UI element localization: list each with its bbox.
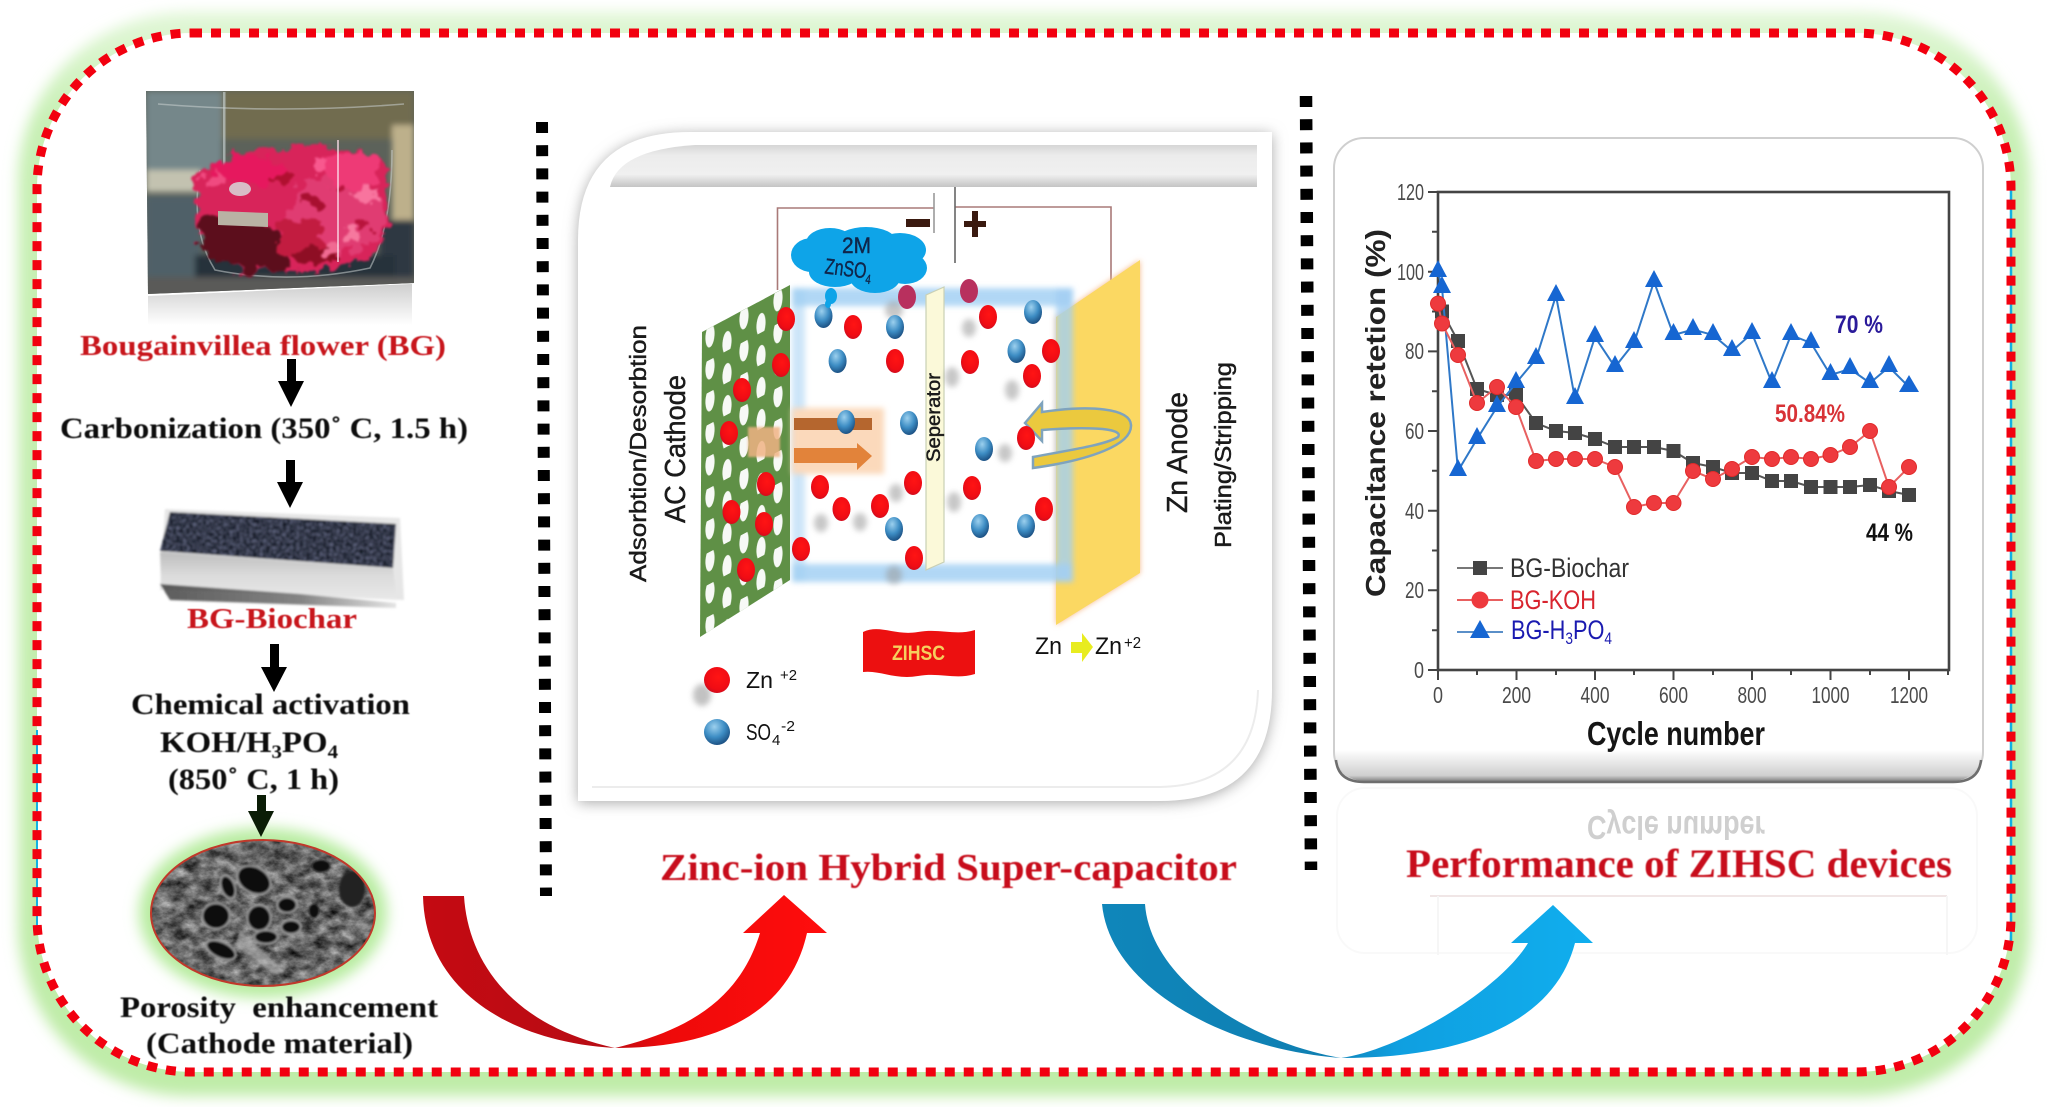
x-axis tick labels: [1433, 682, 1928, 708]
caption: porosity enhancement: Porosity enhancement: [120, 991, 438, 1024]
electrolyte cloud: 2M ZnSO4: 2M: [842, 233, 871, 258]
x-axis tick labels: 1200: [1890, 682, 1928, 708]
plus sign: [964, 211, 986, 237]
panel: capacitance retention chart: [1334, 138, 1983, 782]
ion legend: +2: [780, 667, 797, 684]
x-axis tick labels: 0: [1433, 682, 1443, 708]
y-axis tick labels: 80: [1405, 338, 1424, 364]
ion transport arrows: [748, 408, 884, 474]
y-axis tick labels: 120: [1397, 179, 1424, 205]
arrow: activation to porous carbon: [248, 795, 274, 837]
arrow: carbonization to biochar: [277, 460, 303, 508]
caption: porosity enhancement: [120, 991, 438, 1060]
x-axis tick labels: 800: [1738, 682, 1766, 708]
reaction: Zn to Zn2+: [1035, 633, 1141, 662]
ion legend: Zn: [746, 667, 773, 693]
electrolyte frame: [792, 288, 1073, 582]
reflection of chart panel: Cycle number: [1587, 809, 1765, 846]
ion shadows: [814, 301, 1019, 584]
label: Bougainvillea flower (BG): Bougainvillea flower (BG): [80, 330, 446, 362]
step: chemical activation: Chemical activation: [131, 688, 410, 721]
plot frame and ticks: [1428, 192, 1949, 680]
cathode plate with pores: [700, 285, 790, 637]
step: chemical activation: PO: [282, 726, 328, 759]
sulfate ions: [814, 300, 1042, 541]
rotated electrode labels: Seperator: [924, 372, 945, 462]
left column: bougainvillea to cathode process: [60, 91, 468, 1060]
y-axis tick labels: 60: [1405, 418, 1424, 444]
y-axis tick labels: 20: [1405, 577, 1424, 603]
minus sign: [906, 219, 930, 227]
divider: left dotted line: [542, 122, 546, 896]
anode plate: [1056, 260, 1140, 625]
separator membrane: [926, 287, 944, 570]
x-axis tick labels: 1000: [1812, 682, 1850, 708]
x-axis tick labels: 400: [1580, 682, 1610, 708]
chart legend: BG-KOH: [1510, 585, 1596, 615]
annotation: 44 %: 44 %: [1866, 519, 1913, 547]
anode return arrow: [1025, 403, 1131, 468]
y-axis tick labels: [1397, 179, 1424, 683]
ion legend: SO: [746, 719, 771, 745]
series: BG-KOH: [1430, 296, 1916, 514]
series: BG-H3PO4: [1429, 260, 1919, 476]
rotated electrode labels: Plating/Stripping: [1210, 362, 1236, 548]
rotated electrode labels: Zn Anode: [1162, 392, 1194, 513]
chart legend: PO: [1573, 615, 1604, 645]
panel: zinc-ion hybrid supercapacitor schematic: [578, 132, 1272, 803]
Zn2+ ions: [720, 279, 1060, 582]
chart legend: BG-H: [1511, 615, 1578, 645]
rotated electrode labels: [625, 325, 1236, 582]
rotated electrode labels: Adsorbtion/Desorbtion: [625, 325, 651, 582]
y-axis title: Capacitance retetion (%): [1360, 229, 1391, 597]
reaction: Zn to Zn2+: Zn: [1095, 633, 1122, 660]
step: chemical activation: (850˚ C, 1 h): [168, 763, 339, 796]
image: SEM micrograph of porous carbon: [151, 840, 375, 986]
reaction: Zn to Zn2+: Zn: [1035, 633, 1062, 660]
electrolyte cloud: 2M ZnSO4: 4: [865, 271, 872, 287]
glow around SEM image: [139, 828, 387, 998]
circuit wires and battery: [778, 187, 1111, 290]
arrow: red curve from cathode material to supercapacitor: [423, 895, 827, 1048]
y-axis tick labels: 0: [1414, 657, 1424, 683]
reaction: Zn to Zn2+: +2: [1124, 635, 1141, 652]
arrow: blue curve from supercapacitor to performance: [1102, 904, 1593, 1058]
chart legend: [1457, 553, 1629, 648]
electrolyte cloud: 2M ZnSO4: [791, 227, 927, 308]
ion legend: [693, 667, 797, 749]
series: BG-Biochar: [1435, 304, 1916, 502]
ion legend: -2: [781, 718, 795, 735]
chart legend: 3: [1565, 629, 1573, 648]
ZIHSC banner: ZIHSC: [892, 642, 945, 665]
heading: Performance of ZIHSC devices: Performance of ZIHSC devices: [1406, 841, 1952, 886]
x-axis title: Cycle number: [1587, 715, 1765, 752]
chart legend: BG-Biochar: [1510, 553, 1629, 583]
x-axis tick labels: 600: [1659, 682, 1688, 708]
photo: biochar in tray: [160, 509, 404, 608]
y-axis tick labels: 100: [1397, 259, 1424, 285]
rotated electrode labels: AC Cathode: [660, 375, 692, 523]
arrow: flower to carbonization: [278, 359, 304, 407]
divider: right dotted line: [1306, 96, 1311, 870]
annotation: 50.84%: 50.84%: [1775, 400, 1845, 428]
annotation: 70 %: 70 %: [1835, 311, 1883, 339]
step: chemical activation: 3: [271, 742, 282, 763]
y-axis tick labels: 40: [1405, 498, 1424, 524]
step: chemical activation: 4: [328, 742, 339, 763]
electrolyte cloud: 2M ZnSO4: ZnSO: [824, 253, 884, 285]
label: BG-Biochar: BG-Biochar: [187, 603, 357, 635]
step: chemical activation: [131, 688, 410, 796]
heading: Zinc-ion Hybrid Super-capacitor: Zinc-ion Hybrid Super-capacitor: [660, 847, 1237, 889]
step: carbonization: Carbonization (350˚ C, 1.5 h): [60, 412, 468, 445]
chart legend: 4: [1604, 629, 1612, 648]
ZIHSC banner: [863, 629, 975, 677]
x-axis tick labels: 200: [1502, 682, 1531, 708]
ion legend: 4: [772, 732, 780, 749]
step: chemical activation: KOH/H: [160, 726, 262, 759]
arrow: biochar to activation: [261, 644, 287, 692]
caption: porosity enhancement: (Cathode material): [146, 1027, 413, 1060]
photo: beaker of bougainvillea flowers: [146, 91, 414, 325]
reflection of chart panel: [1337, 788, 1977, 955]
